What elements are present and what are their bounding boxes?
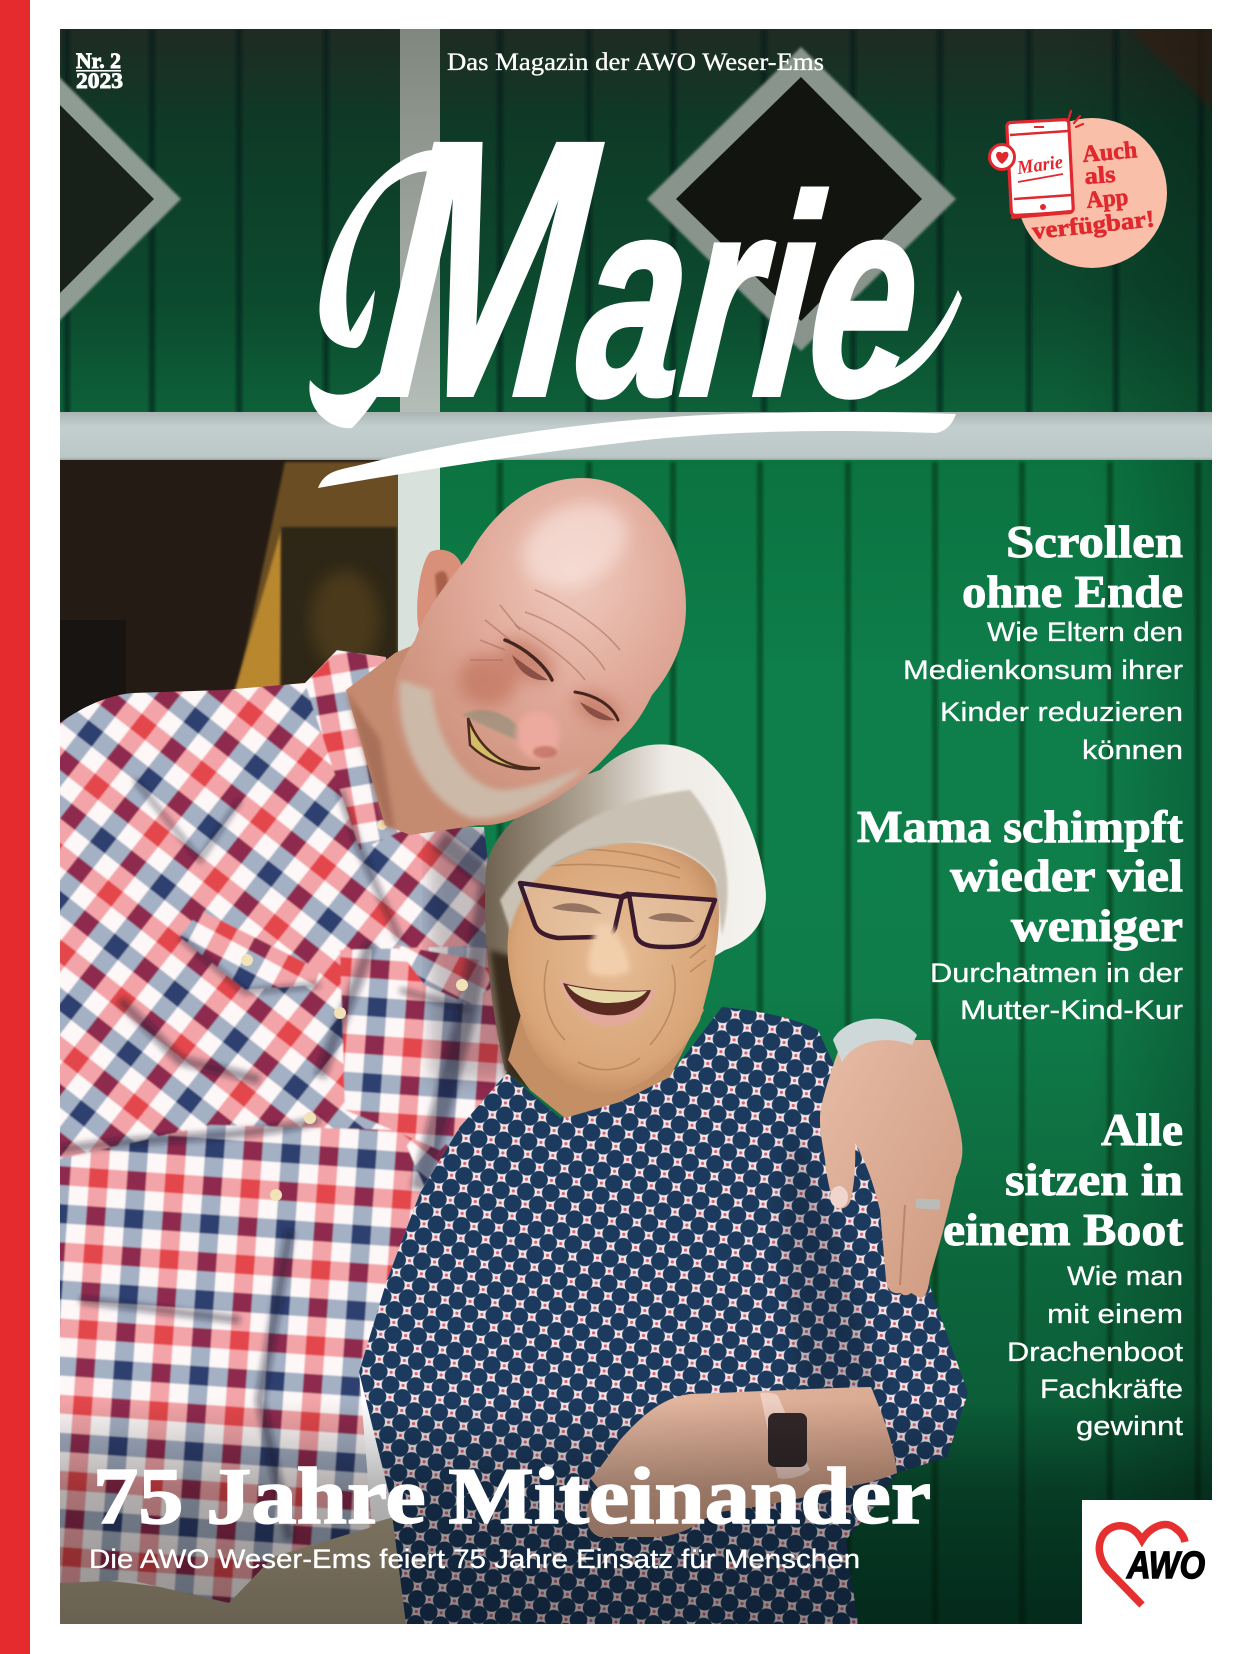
man smile [468, 718, 540, 769]
man wrist and hand on shoulder [820, 1019, 962, 1298]
badge text: App [1085, 184, 1129, 214]
masthead underline swash [318, 412, 956, 488]
story: Mama schimpft wieder viel weniger: Mutter-Kind-Kur [960, 995, 1183, 1025]
story: Scrollen ohne Ende: Scrollen [1006, 517, 1183, 567]
badge text: Auch [1081, 137, 1138, 168]
vertical window mullion lower [398, 468, 440, 652]
story: Alle sitzen in einem Boot: mit einem [1047, 1299, 1183, 1329]
story: Mama schimpft wieder viel weniger: weniger [1011, 901, 1183, 951]
bottom darkening [60, 1400, 1212, 1624]
phone icon: Marie [1015, 152, 1065, 179]
story: Scrollen ohne Ende [903, 517, 1183, 765]
AWO logo box [1082, 1500, 1212, 1624]
red spine bar [0, 0, 30, 1654]
diamond window right [647, 47, 956, 351]
story: Alle sitzen in einem Boot: einem Boot [943, 1205, 1183, 1255]
green wooden door lower section [440, 460, 1212, 1624]
badge text: als [1084, 162, 1116, 190]
man forehead wrinkles [470, 590, 620, 680]
diamond window left [60, 76, 182, 322]
woman nose [588, 925, 630, 976]
story: Scrollen ohne Ende: Wie Eltern den [987, 617, 1183, 647]
vertical window mullion upper [400, 29, 440, 414]
woman smile [558, 978, 657, 1026]
issue number: 2023 [76, 68, 123, 93]
story: Alle sitzen in einem Boot: Fachkräfte [1040, 1374, 1183, 1404]
story: Mama schimpft wieder viel weniger: Mama schimpft [857, 802, 1183, 852]
man trousers [60, 1518, 406, 1624]
story: Alle sitzen in einem Boot: sitzen in [1005, 1155, 1183, 1205]
story: Alle sitzen in einem Boot: Drachenboot [1007, 1337, 1184, 1367]
story: Alle sitzen in einem Boot: Alle [1101, 1105, 1183, 1155]
man checked shirt [55, 640, 525, 1610]
badge text: verfügbar! [1031, 206, 1156, 245]
woman dotted dress [359, 1007, 968, 1624]
green wooden door upper section [60, 29, 1212, 415]
woman hair back [485, 744, 766, 1090]
horizontal window rail [60, 412, 1212, 462]
woman face and neck [500, 790, 727, 1118]
woman glasses [520, 883, 715, 947]
story: Mama schimpft wieder viel weniger [857, 802, 1183, 1025]
shirt buttons [241, 820, 468, 1201]
dark interior behind window [60, 460, 400, 730]
issue number: Nr. 2 [76, 48, 121, 73]
masthead logo: Marie [364, 65, 942, 473]
story: Alle sitzen in einem Boot [943, 1105, 1184, 1441]
story: Scrollen ohne Ende: Medienkonsum ihrer [903, 655, 1183, 685]
main subheadline: Die AWO Weser-Ems feiert 75 Jahre Einsatz für Menschen [89, 1544, 860, 1574]
story: Scrollen ohne Ende: können [1082, 735, 1183, 765]
AWO wordmark: AWO [1126, 1545, 1205, 1587]
story: Scrollen ohne Ende: Kinder reduzieren [940, 697, 1183, 727]
AWO heart [1099, 1525, 1185, 1605]
man cheek shading [458, 628, 626, 731]
app badge [990, 111, 1167, 268]
man eyes [505, 640, 618, 720]
man head and neck [346, 478, 686, 835]
story: Mama schimpft wieder viel weniger: Durchatmen in der [930, 958, 1183, 988]
woman forearm with watch [587, 1387, 897, 1537]
story: Mama schimpft wieder viel weniger: wieder viel [950, 851, 1183, 901]
woman face wrinkles [544, 849, 706, 1070]
main headline: 75 Jahre Miteinander [93, 1453, 931, 1541]
magazine tagline: Das Magazin der AWO Weser-Ems [447, 49, 824, 76]
masthead flourish [309, 150, 450, 428]
story: Alle sitzen in einem Boot: Wie man [1067, 1261, 1183, 1291]
story: Alle sitzen in einem Boot: gewinnt [1076, 1411, 1184, 1441]
woman hair fringe [500, 790, 727, 935]
stubble beard [399, 680, 585, 819]
phone icon [990, 111, 1083, 217]
man nose [516, 711, 560, 759]
badge text [1031, 137, 1156, 245]
story: Scrollen ohne Ende: ohne Ende [962, 567, 1183, 617]
issue number [76, 48, 123, 93]
ear [417, 550, 462, 636]
